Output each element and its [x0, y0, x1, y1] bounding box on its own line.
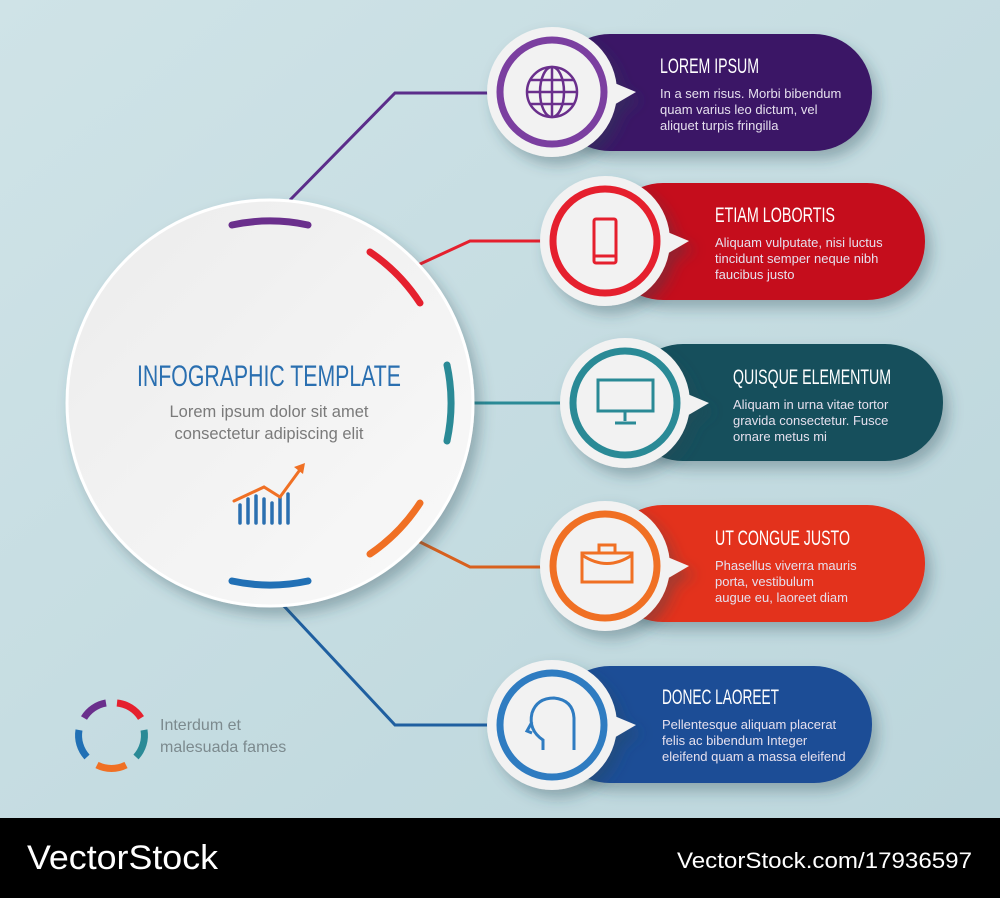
legend: malesuada fames — [160, 739, 286, 756]
item 1: lorem ipsum: In a sem risus. Morbi bibendum — [660, 86, 841, 101]
icon: monitor — [598, 380, 653, 423]
item 3: quisque elementum: gravida consectetur. Fusce — [733, 413, 888, 428]
central subtitle: Lorem ipsum dolor sit amet — [170, 403, 369, 421]
item 3: quisque elementum: QUISQUE ELEMENTUM — [733, 366, 891, 389]
icon: phone — [594, 219, 616, 263]
legend: Interdum et — [160, 717, 241, 734]
item 3: quisque elementum: Aliquam in urna vitae tortor — [733, 397, 889, 412]
icon: head — [527, 698, 574, 750]
item 5: donec laoreet: Pellentesque aliquam placerat — [662, 717, 837, 732]
item 3: quisque elementum — [560, 338, 943, 468]
footer: VectorStock.com/17936597 — [677, 848, 972, 873]
item 1: lorem ipsum: aliquet turpis fringilla — [660, 118, 779, 133]
item 4: ut congue justo: augue eu, laoreet diam — [715, 590, 848, 605]
item 1: lorem ipsum — [487, 27, 872, 157]
item 2: etiam lobortis — [540, 176, 925, 306]
item 4: ut congue justo: Phasellus viverra mauris — [715, 558, 857, 573]
item 4: ut congue justo: UT CONGUE JUSTO — [715, 527, 850, 550]
item 2: etiam lobortis: faucibus justo — [715, 267, 794, 282]
icon: briefcase — [582, 545, 632, 582]
icon: growth chart — [234, 463, 305, 523]
arcs — [232, 221, 451, 585]
footer: VectorStock — [27, 839, 219, 877]
item 1: lorem ipsum: LOREM IPSUM — [660, 55, 759, 78]
icon: globe — [527, 67, 577, 117]
central title: INFOGRAPHIC TEMPLATE — [137, 360, 401, 393]
item 4: ut congue justo — [540, 501, 925, 631]
item 5: donec laoreet: felis ac bibendum Integer — [662, 733, 808, 748]
central circle — [67, 200, 473, 606]
item 5: donec laoreet — [487, 660, 872, 790]
legend — [79, 703, 286, 768]
item 2: etiam lobortis: tincidunt semper neque nibh — [715, 251, 878, 266]
item 5: donec laoreet: DONEC LAOREET — [662, 686, 779, 709]
item 1: lorem ipsum: quam varius leo dictum, vel — [660, 102, 818, 117]
connector lines — [283, 93, 570, 725]
item 4: ut congue justo: porta, vestibulum — [715, 574, 814, 589]
footer — [0, 818, 1000, 898]
central circle: consectetur adipiscing elit — [175, 425, 364, 443]
item 2: etiam lobortis: ETIAM LOBORTIS — [715, 204, 835, 227]
item 5: donec laoreet: eleifend quam a massa eleifend — [662, 749, 846, 764]
item 2: etiam lobortis: Aliquam vulputate, nisi luctus — [715, 235, 883, 250]
item 3: quisque elementum: ornare metus mi — [733, 429, 827, 444]
